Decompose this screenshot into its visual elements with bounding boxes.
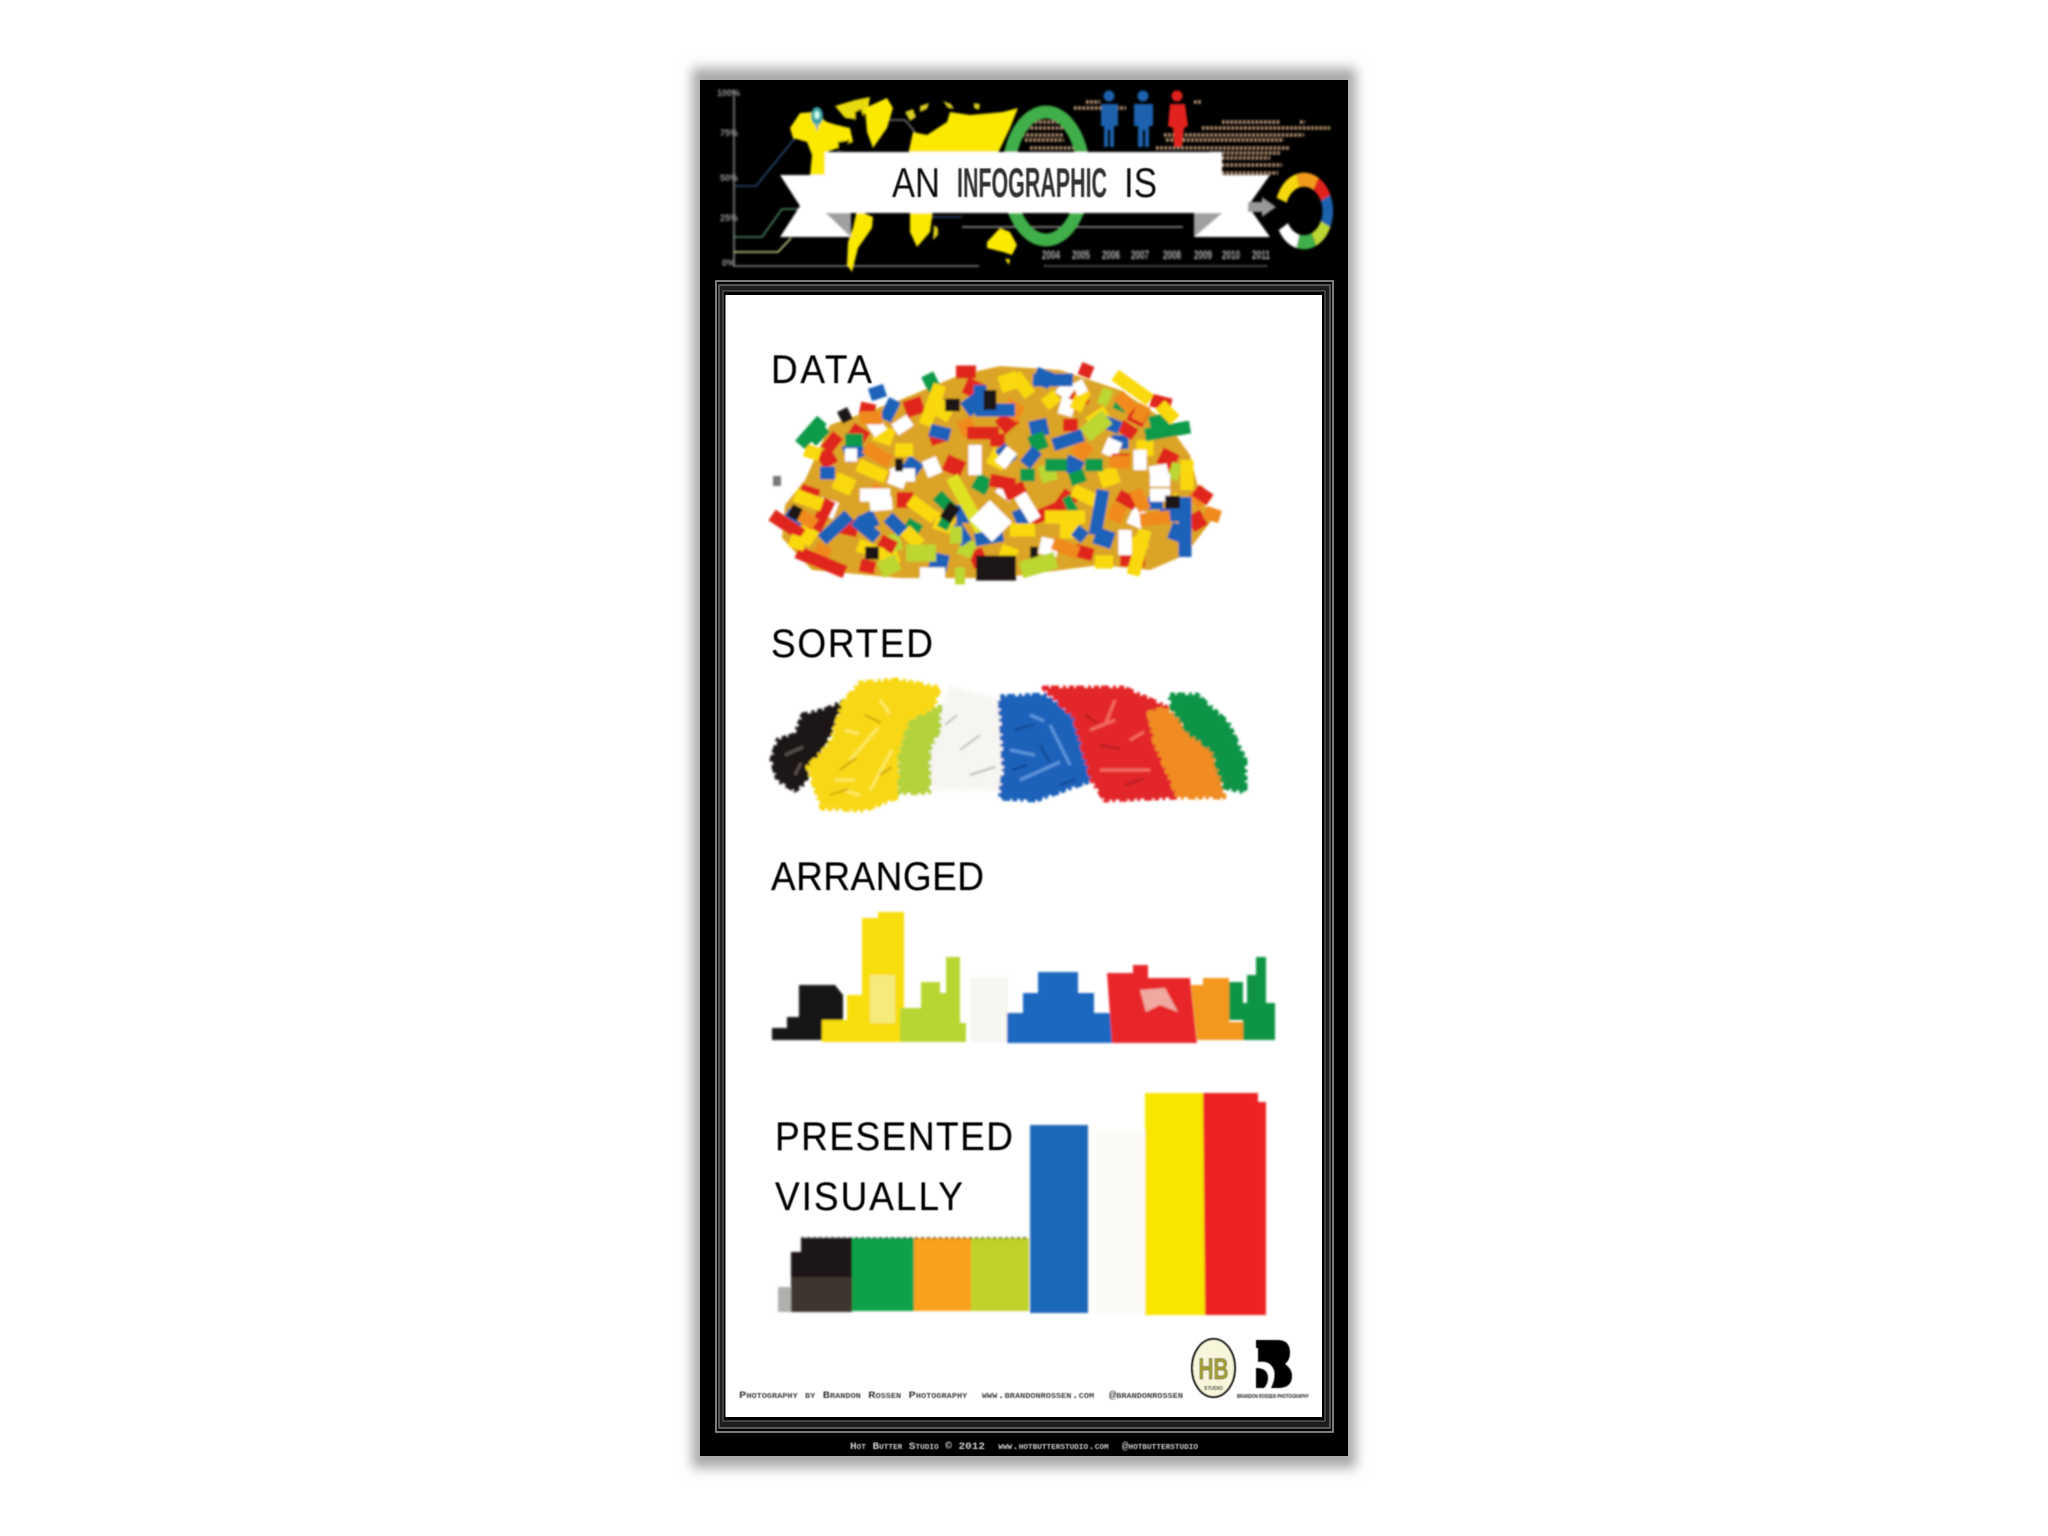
red bar: [1203, 1093, 1266, 1315]
frame: [716, 281, 1333, 1432]
heading: presented visually: VISUALLY: [775, 1175, 963, 1219]
studio credit: Hot Butter Studio © 2012 www.hotbutterstudio.com @hotbutterstudio: [850, 1441, 1198, 1453]
lime stack: [900, 957, 966, 1042]
orange bar: [914, 1238, 971, 1311]
year axis: 2007: [1131, 248, 1149, 262]
yellow bricks: [808, 680, 939, 810]
y-axis labels: 0%: [722, 258, 735, 268]
line chart traces: [734, 90, 1183, 266]
bricks sorted by colour: [772, 680, 1245, 810]
logo: hot butter oval: STUDIO: [1204, 1386, 1223, 1392]
yellow stack: [822, 912, 910, 1042]
blue bar: [1030, 1125, 1088, 1313]
heading: presented visually: PRESENTED: [775, 1115, 1013, 1159]
y-axis labels: 100%: [717, 88, 740, 98]
year axis: 2011: [1252, 248, 1270, 262]
lime bar: [971, 1238, 1029, 1311]
black bar: [791, 1238, 858, 1312]
year axis: 2009: [1194, 248, 1212, 262]
red bricks: [1044, 688, 1178, 800]
y-axis labels: 25%: [720, 213, 738, 223]
year axis: 2008: [1163, 248, 1181, 262]
white stack: [970, 977, 1008, 1042]
y-axis labels: 50%: [720, 173, 738, 183]
person icons: [1101, 90, 1188, 147]
white bricks: [925, 687, 1005, 790]
orange stack: [1191, 978, 1254, 1040]
photo credit: Photography by Brandon Rossen Photography www.brandonrossen.com @brandonrossen: [739, 1390, 1183, 1402]
y-axis labels: 75%: [720, 128, 738, 138]
logo: hot butter oval: HB: [1198, 1353, 1228, 1386]
poster black background: [700, 80, 1348, 1456]
green bricks: [1170, 695, 1245, 792]
poster drop shadow: [692, 68, 1356, 1468]
black stack: [772, 985, 843, 1040]
bricks arranged in stacks: [772, 912, 1275, 1043]
ribbon tails: [780, 175, 1270, 237]
blue bricks: [1000, 695, 1092, 800]
logo: brandon rossen: [1237, 1340, 1310, 1400]
map cutouts: [838, 109, 936, 151]
arrow into donut: [1248, 197, 1276, 217]
dotted world map: [1018, 102, 1330, 173]
title banner: [825, 152, 1222, 213]
white bar: [1094, 1130, 1145, 1313]
year axis: 2004: [1042, 248, 1060, 262]
y-axis labels: [717, 88, 740, 268]
year axis: 2006: [1102, 248, 1120, 262]
heading: arranged: ARRANGED: [771, 855, 984, 899]
title: AN: [892, 159, 940, 206]
heading: sorted: SORTED: [771, 622, 933, 666]
grey small bar: [778, 1287, 792, 1312]
title: IS: [1124, 159, 1157, 206]
yellow bar: [1145, 1093, 1205, 1315]
orange bricks: [1149, 708, 1224, 797]
logo: brandon rossen: BRANDON ROSSEN PHOTOGRAPHY: [1237, 1394, 1310, 1400]
logo: hot butter oval: [1192, 1339, 1235, 1397]
black bricks: [772, 702, 843, 790]
header graphic collage: [717, 88, 1330, 272]
year axis: 2005: [1072, 248, 1090, 262]
lime bricks: [900, 707, 940, 793]
title: INFOGRAPHIC: [957, 159, 1107, 206]
red stack: [1107, 965, 1197, 1043]
bar chart of bricks: [778, 1093, 1266, 1315]
year axis: [1042, 248, 1270, 266]
green ring: [1008, 112, 1084, 240]
heading: data: DATA: [771, 348, 872, 392]
green bar: [852, 1238, 914, 1311]
blue stack: [1007, 972, 1115, 1043]
year axis: 2010: [1222, 248, 1240, 262]
green stack: [1229, 957, 1275, 1040]
pile of mixed bricks: [772, 366, 1220, 578]
title: [892, 159, 1157, 206]
donut chart: [1280, 180, 1328, 242]
location pin: [811, 107, 823, 132]
yellow world map: [790, 97, 1018, 272]
heading: presented visually: [775, 1115, 1013, 1219]
white content panel: [726, 295, 1322, 1417]
